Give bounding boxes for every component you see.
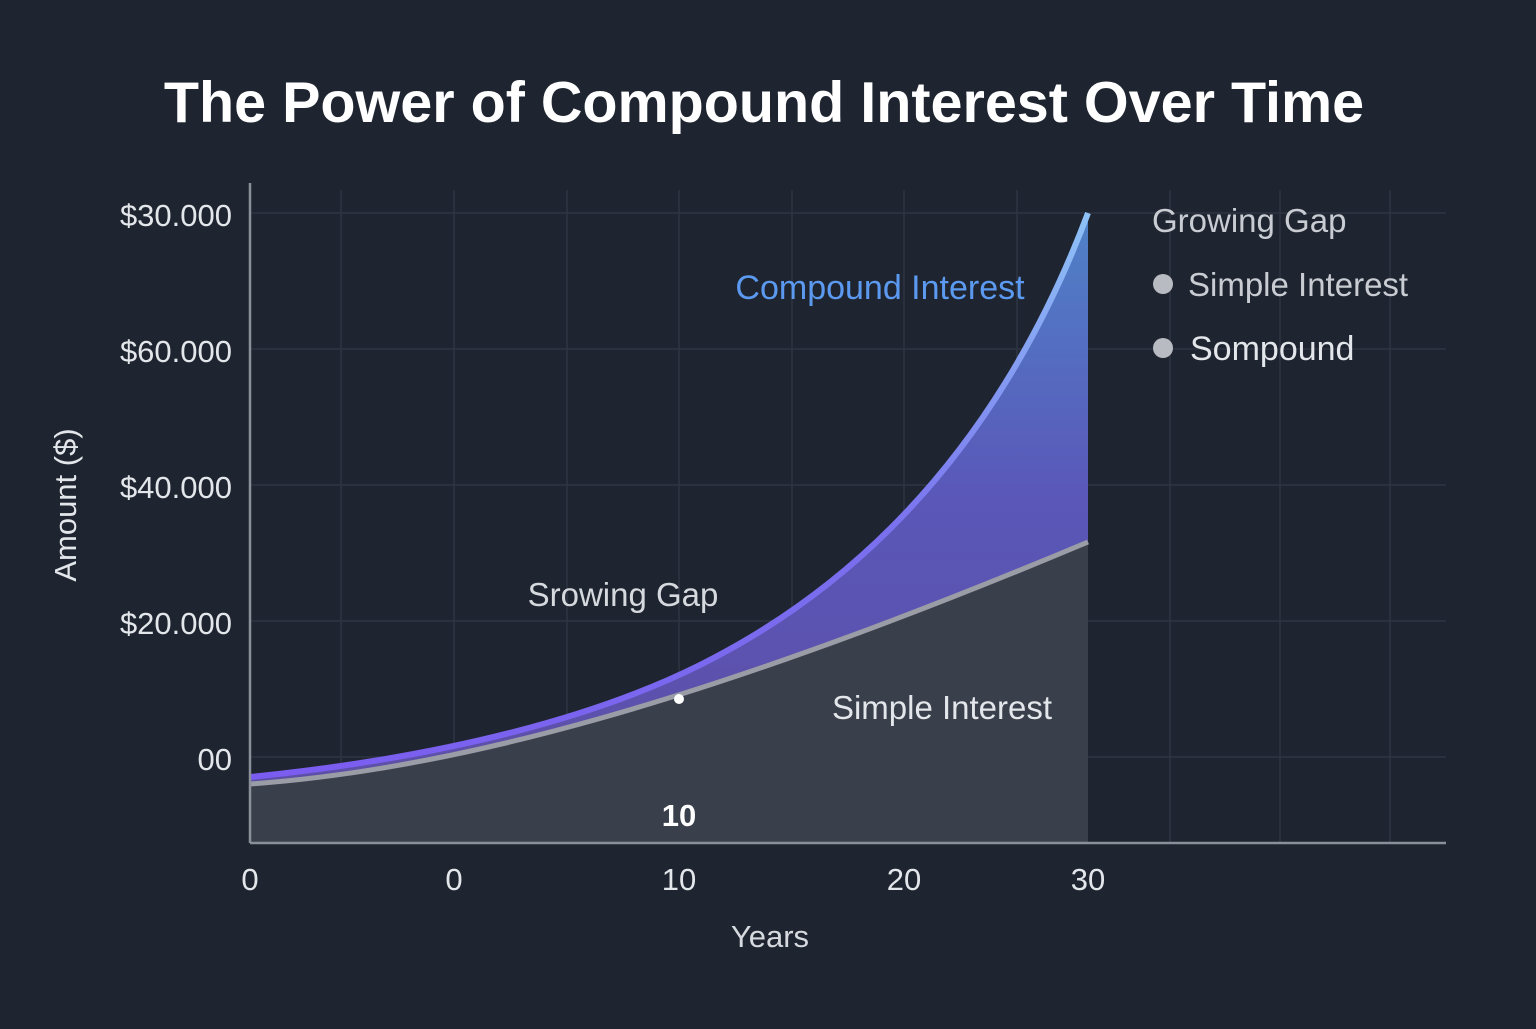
y-axis labels: 00 <box>198 742 232 777</box>
axes <box>250 183 1446 843</box>
area: growing gap <box>250 213 1088 784</box>
y-axis labels: $60.000 <box>120 334 232 369</box>
y-axis title: Amount ($) <box>48 428 83 582</box>
area: simple interest <box>250 542 1088 843</box>
x-axis labels: 30 <box>1071 862 1105 897</box>
x-axis labels: 0 <box>445 862 463 897</box>
legend <box>1152 202 1408 368</box>
title: The Power of Compound Interest Over Time <box>164 71 1364 135</box>
y-axis labels <box>120 198 232 777</box>
marker point <box>674 694 684 704</box>
line: simple interest <box>250 542 1088 784</box>
chart: area fills and curves <box>250 213 1088 843</box>
label: inner 10: 10 <box>662 798 696 833</box>
y-axis labels: $30.000 <box>120 198 232 233</box>
x-axis labels: 20 <box>887 862 921 897</box>
x-axis labels: 0 <box>241 862 259 897</box>
legend: Simple Interest <box>1188 266 1408 303</box>
legend: Sompound <box>1190 330 1354 368</box>
x-axis labels: 10 <box>662 862 696 897</box>
x-axis labels <box>241 862 1105 897</box>
y-axis labels: $40.000 <box>120 470 232 505</box>
line: compound interest <box>250 213 1088 777</box>
legend: Growing Gap <box>1152 202 1346 239</box>
x-axis title: Years <box>731 919 809 954</box>
label: simple interest: Simple Interest <box>832 689 1052 726</box>
label: growing gap: Srowing Gap <box>528 576 718 613</box>
label: compound interest: Compound Interest <box>735 269 1025 307</box>
y-axis labels: $20.000 <box>120 606 232 641</box>
